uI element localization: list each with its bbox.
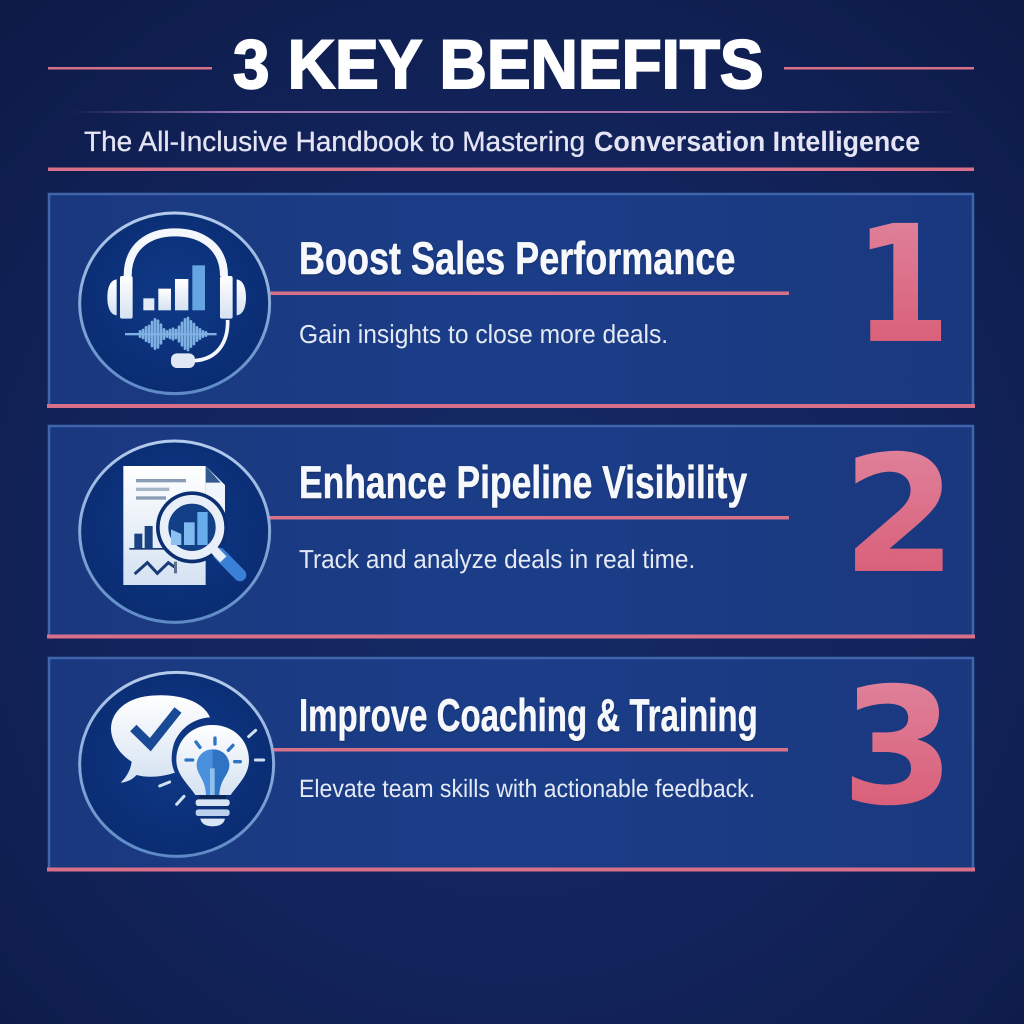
- icon: speech bubble and light bulb: [80, 672, 274, 856]
- subtitle emphasis: Conversation Intelligence: [594, 126, 920, 157]
- subtitle: The All-Inclusive Handbook to Mastering: [84, 126, 585, 157]
- panel: benefit 2: [47, 422, 975, 638]
- heading: Boost Sales Performance: [299, 232, 735, 284]
- description: Track and analyze deals in real time.: [299, 544, 695, 574]
- title: 3 KEY BENEFITS: [233, 26, 764, 103]
- panel: benefit 1: [47, 192, 975, 408]
- description: Gain insights to close more deals.: [299, 319, 668, 349]
- icon: report with magnifier: [80, 441, 270, 622]
- number 1: 1: [854, 192, 951, 380]
- heading: Enhance Pipeline Visibility: [299, 456, 747, 508]
- number 2: 2: [842, 422, 957, 610]
- number 3: 3: [841, 654, 955, 842]
- icon: headset with bars: [80, 213, 270, 394]
- heading: Improve Coaching & Training: [299, 688, 758, 740]
- panel: benefit 3: [47, 654, 975, 872]
- description: Elevate team skills with actionable feedback.: [299, 774, 755, 802]
- header: [48, 26, 974, 171]
